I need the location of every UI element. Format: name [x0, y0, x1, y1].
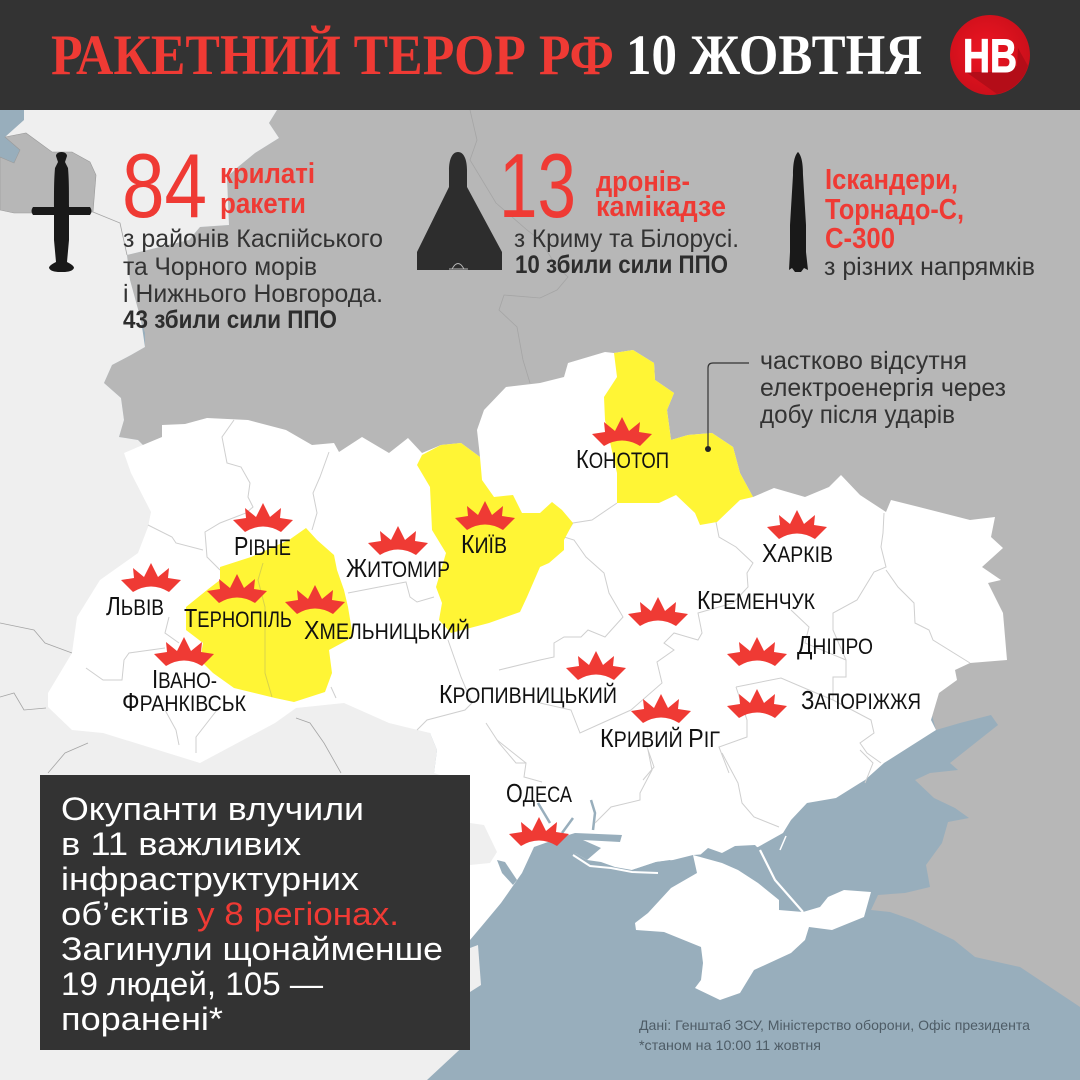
strike marker: Кременчук — [628, 597, 688, 626]
label: Івано-Франківськ: ІВАНО- — [152, 664, 217, 694]
strike marker: Рівне — [233, 503, 293, 532]
callout: power outage — [705, 347, 1006, 452]
label: Тернопіль: ТЕРНОПІЛЬ — [184, 603, 292, 633]
yellow region: Sumy — [604, 350, 753, 525]
boundary Ternopil / Khmelnytskyi — [258, 563, 272, 697]
source note — [639, 1017, 1030, 1053]
strike marker: Львів — [121, 563, 181, 592]
stat: ballistic missiles — [824, 164, 1035, 281]
stat: cruise missiles: і Нижнього Новгорода. — [123, 280, 383, 308]
label: Кременчук: КРЕМЕНЧУК — [697, 585, 815, 615]
strike marker: Київ — [455, 501, 515, 530]
callout: power outage: добу після ударів — [760, 401, 955, 429]
label: Житомир: ЖИТОМИР — [346, 553, 450, 583]
title: РАКЕТНИЙ ТЕРОР РФ — [51, 24, 614, 87]
label: Дніпро: ДНІПРО — [797, 630, 873, 660]
neighbouring countries: Russia and Belarus — [104, 110, 1080, 1007]
Sivash inlets — [700, 845, 772, 880]
label: Івано-Франківськ — [122, 664, 246, 717]
stat: drones: дронів- — [596, 166, 690, 198]
Kaliningrad region — [0, 133, 96, 213]
stat: cruise missiles: та Чорного морів — [123, 253, 317, 281]
stat: drones: камікадзе — [596, 191, 726, 223]
strike marker: Тернопіль — [207, 574, 267, 603]
Ukraine mainland — [48, 350, 1007, 940]
stat: cruise missiles — [122, 136, 383, 334]
summary panel: у 8 регіонах. — [197, 896, 399, 932]
stat: ballistic missiles: Іскандери, — [825, 164, 958, 196]
label: Запоріжжя: ЗАПОРІЖЖЯ — [801, 685, 921, 715]
label: Харків: ХАРКІВ — [762, 538, 833, 568]
icon: ballistic missile — [789, 152, 808, 272]
callout: power outage: частково відсутня — [760, 347, 967, 375]
strike marker: Дніпро — [727, 637, 787, 666]
western border lines — [0, 110, 568, 773]
Dnipro estuary and rivers — [538, 800, 680, 873]
stat: ballistic missiles: Торнадо-С, — [825, 194, 964, 226]
label: Івано-Франківськ: ФРАНКІВСЬК — [122, 687, 246, 717]
stat: drones: з Криму та Білорусі. — [514, 225, 739, 253]
icon: kamikaze drone — [417, 152, 502, 270]
source note: Дані: Генштаб ЗСУ, Міністерство оборони, Офіс президента — [639, 1017, 1030, 1033]
label: Конотоп: КОНОТОП — [576, 444, 669, 474]
header bar — [0, 0, 1080, 110]
Romania fragment — [470, 945, 481, 992]
label: Львів: ЛЬВІВ — [106, 591, 164, 621]
yellow region: Kyiv — [417, 443, 573, 633]
stat: cruise missiles: крилаті — [220, 158, 315, 190]
summary panel: об’єктів — [61, 896, 189, 932]
Baltic sea corner — [0, 110, 24, 163]
Moldova fragment — [470, 823, 497, 865]
label: Одеса: ОДЕСА — [506, 778, 572, 808]
strike marker: Харків — [767, 510, 827, 539]
oblast boundaries — [86, 420, 970, 827]
summary panel: Окупанти влучили — [61, 791, 364, 827]
Arabat spit — [760, 850, 803, 912]
stat: cruise missiles: ракети — [220, 188, 306, 220]
label: Кропивницький: КРОПИВНИЦЬКИЙ — [439, 679, 617, 709]
summary panel: 19 людей, 105 — — [61, 966, 323, 1002]
neighbouring countries: western Europe — [0, 110, 470, 1080]
label: Хмельницький: ХМЕЛЬНИЦЬКИЙ — [304, 615, 470, 645]
strike marker: Кропивницький — [566, 651, 626, 680]
strike marker: Кривий Ріг — [631, 694, 691, 723]
strike marker: Запоріжжя — [727, 689, 787, 718]
stat: cruise missiles: з районів Каспійського — [123, 225, 383, 253]
strike marker: Житомир — [368, 526, 428, 555]
summary panel: в 11 важливих — [61, 826, 301, 862]
summary panel: Загинули щонайменше — [61, 931, 443, 967]
Dniester estuary — [497, 860, 517, 885]
stat: drones: 10 збили сили ППО — [515, 251, 728, 279]
label: Кривий Ріг: КРИВИЙ РІГ — [600, 723, 720, 753]
summary panel: інфраструктурних — [61, 861, 359, 897]
label: Київ: КИЇВ — [461, 529, 507, 559]
logo — [950, 15, 1030, 95]
title: 10 ЖОВТНЯ — [626, 24, 922, 87]
callout: power outage: електроенергія через — [760, 374, 1006, 402]
icon: cruise missile — [32, 152, 92, 272]
summary panel — [40, 775, 470, 1050]
yellow region: Ternopil and Khmelnytskyi — [186, 528, 353, 702]
stat: drones: 13 — [499, 136, 576, 237]
source note: *станом на 10:00 11 жовтня — [639, 1037, 821, 1053]
label: Рівне: РІВНЕ — [234, 531, 291, 561]
strike marker: Хмельницький — [285, 585, 345, 614]
logo: НВ — [963, 29, 1017, 82]
stat: ballistic missiles: з різних напрямків — [824, 253, 1035, 281]
strike marker: Івано-Франківськ — [154, 637, 214, 666]
stat: drones — [499, 136, 739, 279]
summary panel: поранені* — [61, 1001, 223, 1037]
strike marker: Одеса — [509, 817, 569, 846]
stat: ballistic missiles: С-300 — [825, 223, 895, 255]
stat: cruise missiles: 43 збили сили ППО — [123, 306, 337, 334]
stat: cruise missiles: 84 — [122, 136, 207, 237]
Kherson shore spit — [780, 836, 786, 850]
Crimea — [635, 855, 871, 1000]
strike marker: Конотоп — [592, 417, 652, 446]
